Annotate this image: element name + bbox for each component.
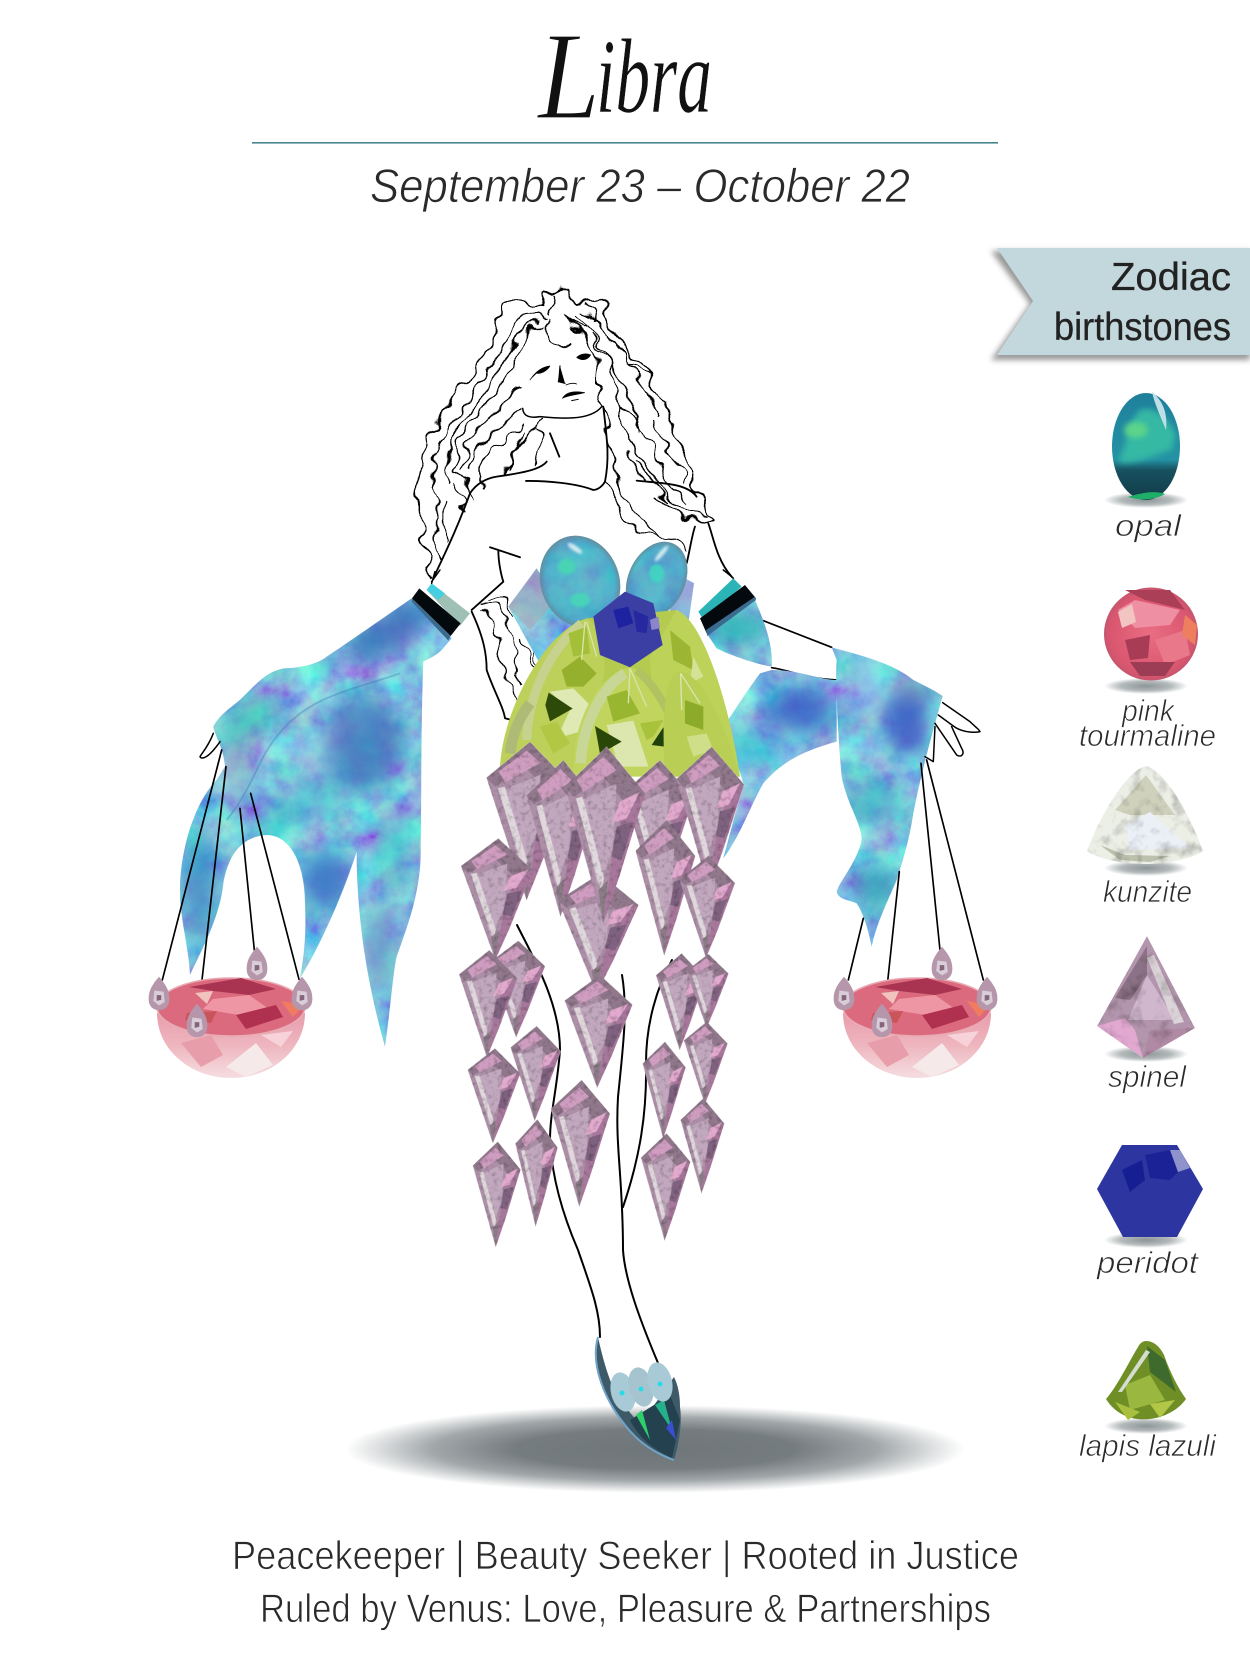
birthstone: kunzite: kunzite <box>1103 874 1192 909</box>
birthstone: spinel: spinel <box>1108 1059 1187 1094</box>
birthstone: kunzite <box>1087 766 1203 909</box>
right arm lines <box>723 570 837 680</box>
right scale strings <box>848 760 983 1007</box>
inner right petal <box>664 672 740 777</box>
ground shadow <box>345 1405 965 1493</box>
central petal <box>573 667 693 777</box>
title: L <box>536 8 600 146</box>
birthstone: lapis lazuli hexagon <box>1096 1145 1203 1280</box>
left wrist piece and black cuff <box>412 583 470 641</box>
right pan spinel drops <box>834 947 997 1037</box>
shoe: black opal with three opal cabochons <box>596 1337 681 1460</box>
right hand line <box>925 703 980 762</box>
right black cuff <box>698 578 756 636</box>
outer right petal <box>650 610 740 777</box>
face <box>523 407 602 418</box>
outer left petal <box>500 618 605 777</box>
ribbon: Zodiac birthstones: Zodiac <box>1111 256 1231 299</box>
birthstone: spinel <box>1097 936 1195 1094</box>
skirt: spinel kite gems <box>459 742 744 1248</box>
ribbon: Zodiac birthstones: birthstones <box>1054 306 1231 349</box>
title <box>536 8 712 146</box>
birthstone: peridot <box>1079 1341 1217 1463</box>
left sleeve <box>162 570 470 1053</box>
skirt: peridot petals <box>500 610 740 777</box>
right arm edge and chest <box>687 523 732 577</box>
left hand line <box>200 733 220 758</box>
ribbon: Zodiac birthstones <box>991 248 1250 360</box>
legs line art <box>517 925 672 1363</box>
bodice centre: lapis hexagon <box>593 592 663 667</box>
right sleeve <box>698 570 983 1007</box>
date range subtitle: September 23 – October 22 <box>370 159 910 212</box>
right pan: pink tourmaline bowl <box>843 978 991 1078</box>
birthstone: pink tourmaline: pink <box>1121 693 1175 728</box>
left scale strings <box>162 750 299 1007</box>
title: ibra <box>596 18 712 135</box>
bodice: opal panels and cups <box>503 524 703 673</box>
waist with hair below arm <box>472 612 512 720</box>
left pan spinel drops <box>149 947 312 1037</box>
neck and shoulders <box>433 433 559 578</box>
wavy hair <box>400 273 727 593</box>
birthstone: lapis lazuli hexagon: peridot <box>1096 1245 1199 1280</box>
birthstone: pink tourmaline <box>1079 588 1216 753</box>
birthstone: pink tourmaline: tourmaline <box>1079 718 1216 753</box>
base behind petals <box>587 610 697 697</box>
figure line art: hair, face, torso <box>400 273 732 720</box>
left pan: pink tourmaline bowl <box>157 978 305 1078</box>
traits tagline: Peacekeeper | Beauty Seeker | Rooted in Justice <box>232 1534 1019 1578</box>
birthstone: peridot: lapis lazuli <box>1079 1428 1217 1463</box>
birthstone: opal <box>1104 392 1188 543</box>
title divider rule <box>252 142 998 144</box>
birthstone: opal: opal <box>1115 508 1182 543</box>
ruling planet tagline: Ruled by Venus: Love, Pleasure & Partnerships <box>260 1587 991 1631</box>
